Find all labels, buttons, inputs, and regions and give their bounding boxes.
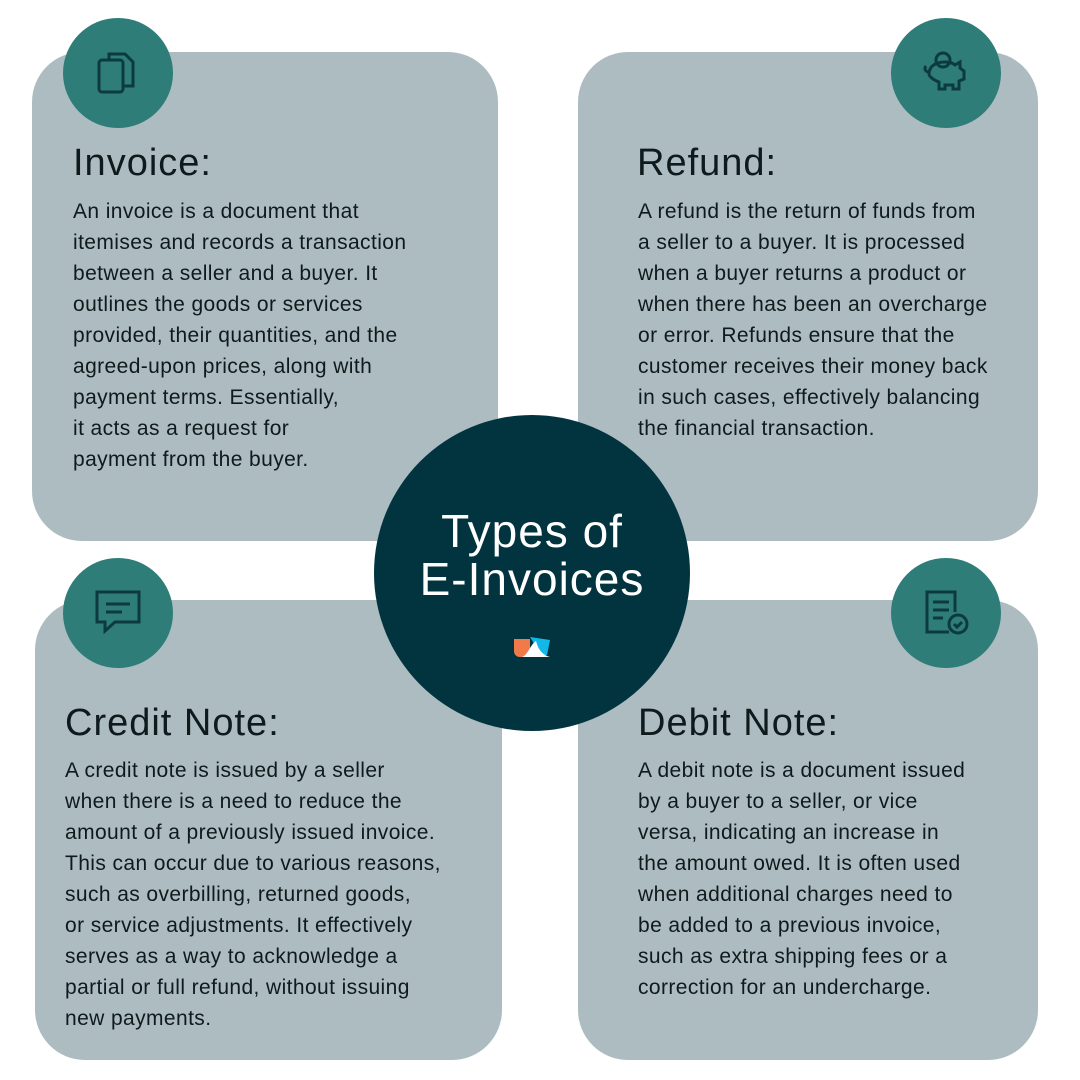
icon: document check (891, 558, 1001, 668)
text: invoice: payment terms. Essentially, (73, 386, 339, 409)
text: credit note: new payments. (65, 1007, 211, 1030)
panel: invoice (32, 52, 498, 541)
text: invoice: payment from the buyer. (73, 448, 309, 471)
heading: invoice: Invoice: (73, 142, 212, 184)
text: credit note: partial or full refund, without issuing (65, 976, 410, 999)
center circle title (374, 415, 690, 731)
title: Types of (441, 505, 623, 557)
text: debit note: correction for an undercharge. (638, 976, 931, 999)
text: invoice (73, 200, 406, 471)
text: refund: A refund is the return of funds from (638, 200, 976, 223)
text: invoice: provided, their quantities, and the (73, 324, 398, 347)
text: invoice: An invoice is a document that (73, 200, 359, 223)
logo (514, 637, 550, 657)
text: debit note: such as extra shipping fees or a (638, 945, 947, 968)
title: E-Invoices (420, 553, 644, 605)
text: refund: or error. Refunds ensure that the (638, 324, 955, 347)
text: refund: in such cases, effectively balancing (638, 386, 980, 409)
text: credit note: when there is a need to reduce the (65, 790, 402, 813)
panel: refund (578, 52, 1038, 541)
text: invoice: it acts as a request for (73, 417, 289, 440)
text: credit note: amount of a previously issued invoice. (65, 821, 435, 844)
text: credit note: such as overbilling, returned goods, (65, 883, 411, 906)
text: credit note: A credit note is issued by a seller (65, 759, 385, 782)
text: invoice: outlines the goods or services (73, 293, 363, 316)
text: credit note: This can occur due to various reasons, (65, 852, 441, 875)
text: refund: the financial transaction. (638, 417, 875, 440)
heading: credit note: Credit Note: (65, 702, 280, 744)
panel: debit note (578, 600, 1038, 1060)
heading: debit note: Debit Note: (638, 702, 839, 744)
title (420, 505, 644, 605)
icon: chat (63, 558, 173, 668)
text: debit note: the amount owed. It is often used (638, 852, 961, 875)
icon: documents (63, 18, 173, 128)
text: debit note: versa, indicating an increase in (638, 821, 939, 844)
icon: piggy bank (891, 18, 1001, 128)
text: debit note: A debit note is a document issued (638, 759, 965, 782)
text: credit note: serves as a way to acknowledge a (65, 945, 398, 968)
text: refund: when there has been an overcharge (638, 293, 987, 316)
text: refund: customer receives their money back (638, 355, 988, 378)
heading: refund: Refund: (637, 142, 777, 184)
text: debit note: by a buyer to a seller, or vice (638, 790, 918, 813)
text: invoice: itemises and records a transaction (73, 231, 406, 254)
text: refund: when a buyer returns a product or (638, 262, 966, 285)
text: invoice: between a seller and a buyer. It (73, 262, 378, 285)
text: debit note (638, 759, 965, 999)
text: invoice: agreed-upon prices, along with (73, 355, 372, 378)
panel: credit note (35, 600, 502, 1060)
text: credit note (65, 759, 441, 1030)
text: debit note: when additional charges need to (638, 883, 953, 906)
text: refund: a seller to a buyer. It is processed (638, 231, 965, 254)
text: credit note: or service adjustments. It effectively (65, 914, 412, 937)
text: debit note: be added to a previous invoice, (638, 914, 941, 937)
text: refund (638, 200, 988, 440)
